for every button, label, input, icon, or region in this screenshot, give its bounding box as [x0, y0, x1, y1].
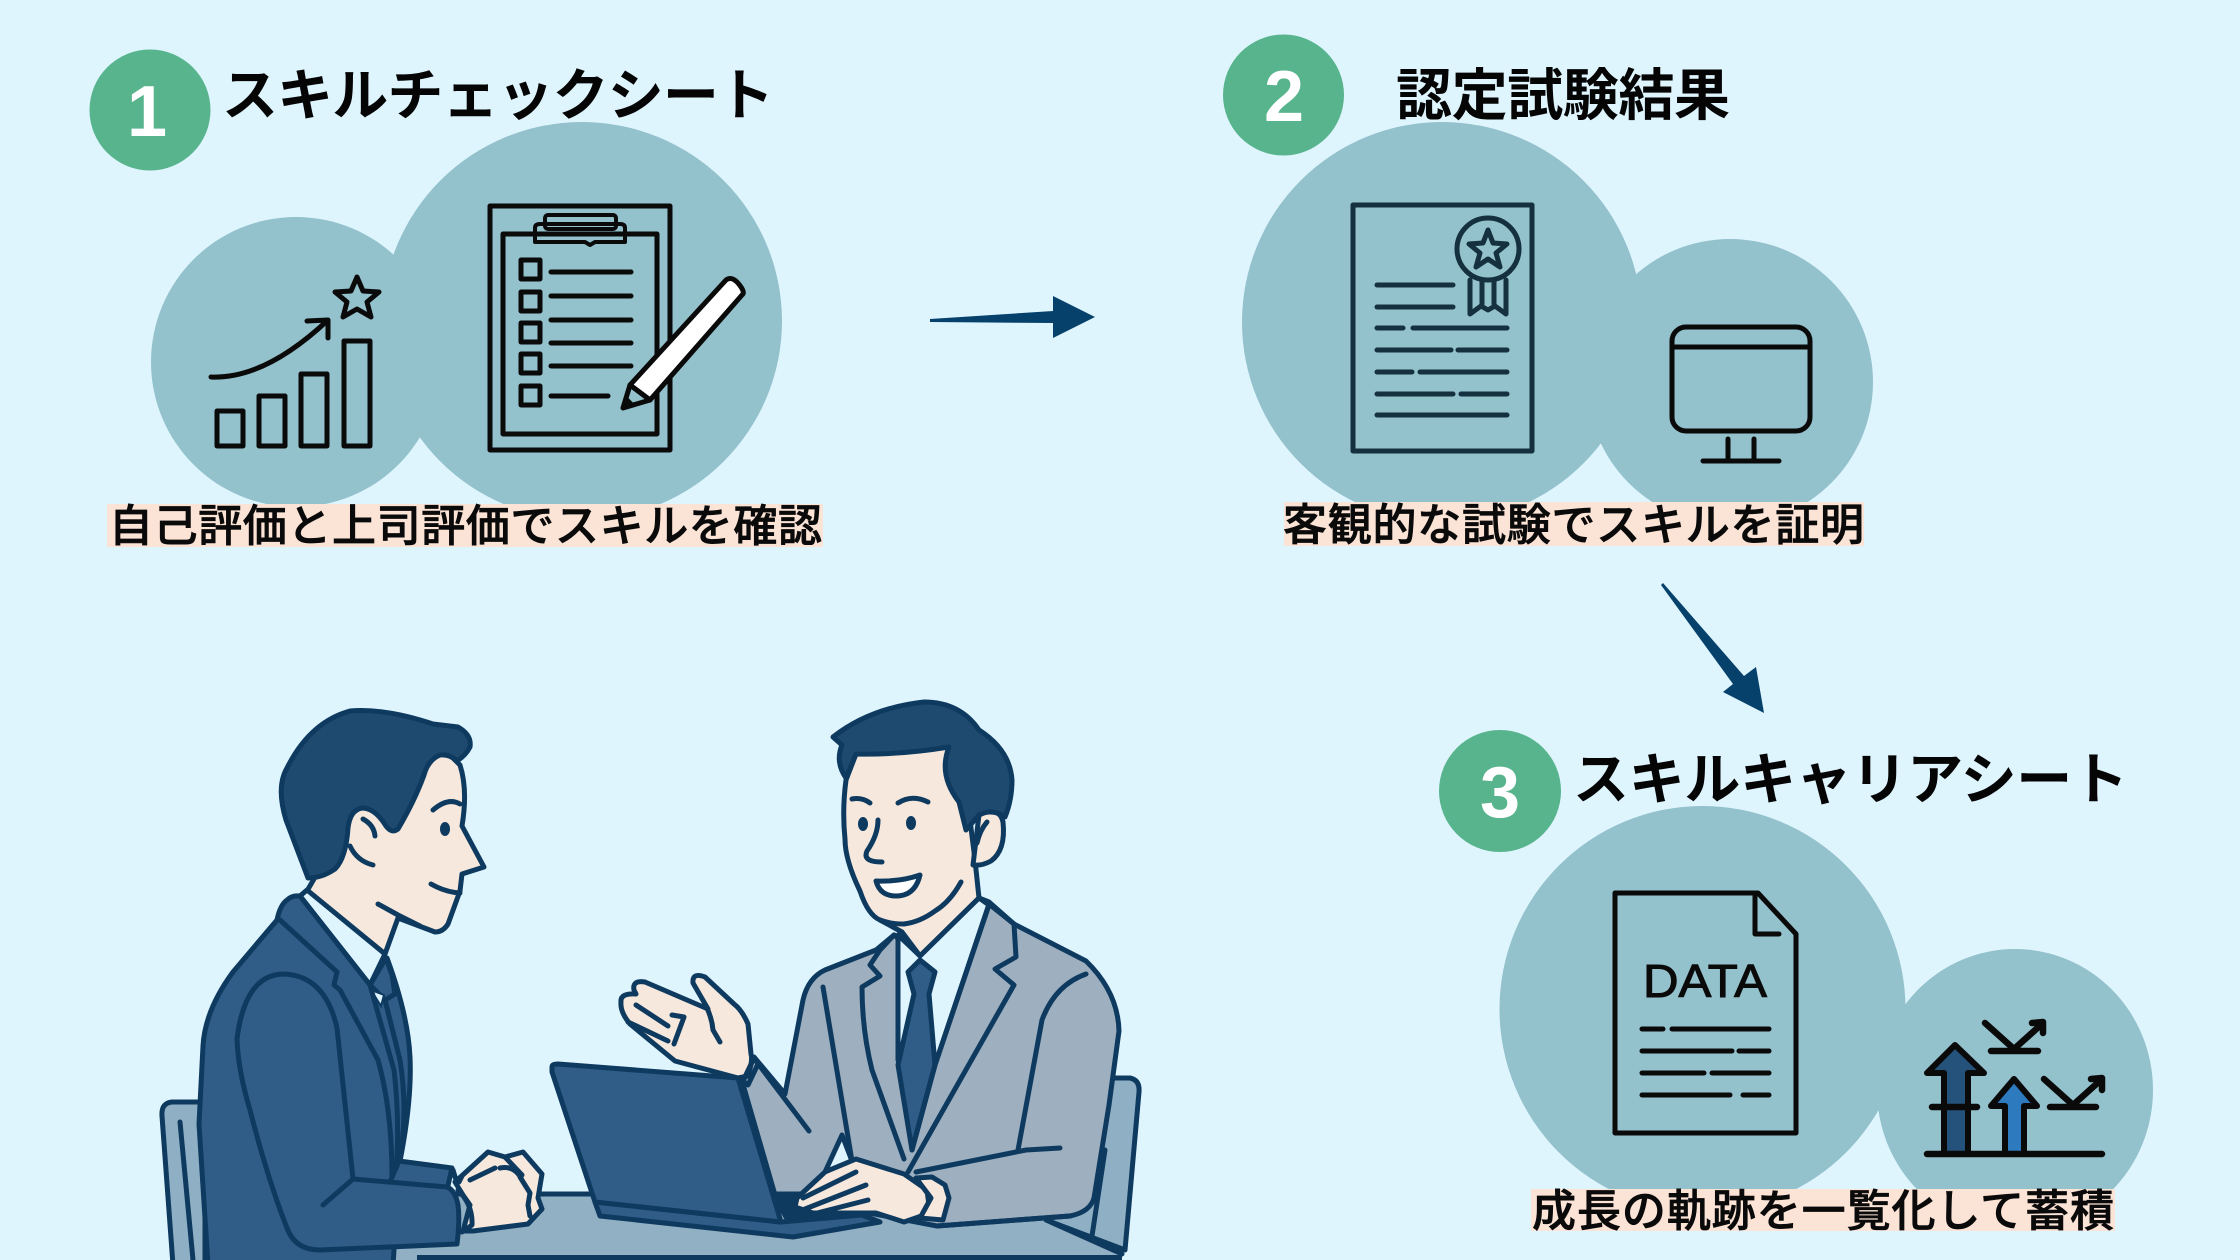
number badge 1: 1	[127, 72, 167, 152]
background circles	[151, 122, 782, 520]
arrow: step 1 to step 2	[930, 296, 1095, 338]
chair: right	[1046, 1078, 1139, 1250]
heading: certification exam results: 認定試験結果	[1396, 64, 1730, 127]
background circles	[1242, 122, 1873, 525]
number badge 2: 2	[1264, 57, 1304, 137]
icon: growth arrows	[1927, 1022, 2102, 1154]
arrow: step 2 to step 3	[1661, 583, 1764, 713]
icon: certificate with medal	[1353, 205, 1532, 451]
jaw line	[880, 882, 961, 924]
shirt sliver and tie	[370, 958, 395, 1000]
hair	[281, 711, 470, 878]
raised hand	[621, 975, 758, 1085]
face and neck	[307, 750, 484, 954]
table	[395, 1194, 1122, 1260]
illustration: two businessmen meeting at a table	[162, 702, 1139, 1260]
typing hand and cuff	[795, 1159, 1070, 1226]
caption highlight and text: 客観的な試験でスキルを証明	[1283, 501, 1864, 550]
number badge 3: 3	[1480, 753, 1520, 833]
lapels and creases	[753, 904, 1086, 1172]
panel: step 2 certification result	[1223, 34, 1873, 550]
panel: step 1 skill check sheet	[90, 50, 823, 551]
heading: skill check sheet: スキルチェックシート	[222, 64, 774, 127]
lapels	[280, 896, 404, 1176]
heading: skill career sheet: スキルキャリアシート	[1573, 748, 2128, 811]
icon: data document: DATA	[1643, 955, 1767, 1007]
back hand	[455, 1152, 542, 1231]
jacket body	[199, 896, 410, 1260]
person: left man in navy suit	[199, 711, 542, 1260]
gap between arm and body	[825, 1135, 852, 1172]
caption highlight and text: 自己評価と上司評価でスキルを確認	[109, 502, 822, 551]
neck and face	[844, 747, 979, 956]
forearm behind	[390, 1161, 452, 1190]
cuff and fingers	[453, 1157, 530, 1232]
number badge 2	[1223, 34, 1344, 156]
jacket	[742, 898, 1119, 1226]
face details	[852, 798, 987, 896]
person: right man in grey suit	[621, 702, 1119, 1226]
background circles	[1500, 806, 2153, 1231]
number badge 3	[1439, 730, 1561, 852]
chair: left	[162, 1102, 205, 1260]
ear	[973, 811, 1004, 865]
shirt	[898, 898, 989, 1100]
tie	[898, 960, 935, 1150]
icon: computer monitor	[1672, 327, 1810, 461]
panel: step 3 skill career sheet	[1439, 730, 2153, 1236]
upper arm and sleeve	[237, 974, 459, 1250]
icon: rising bar chart with star	[211, 277, 379, 446]
shirt collar	[300, 890, 385, 985]
laptop	[552, 1064, 880, 1237]
hair	[833, 702, 1012, 830]
face details	[350, 802, 460, 926]
caption highlight and text: 成長の軌跡を一覧化して蓄積	[1532, 1187, 2114, 1236]
icon: data document	[1615, 893, 1796, 1133]
number badge 1	[90, 50, 210, 170]
icon: clipboard checklist with pencil	[490, 206, 743, 450]
